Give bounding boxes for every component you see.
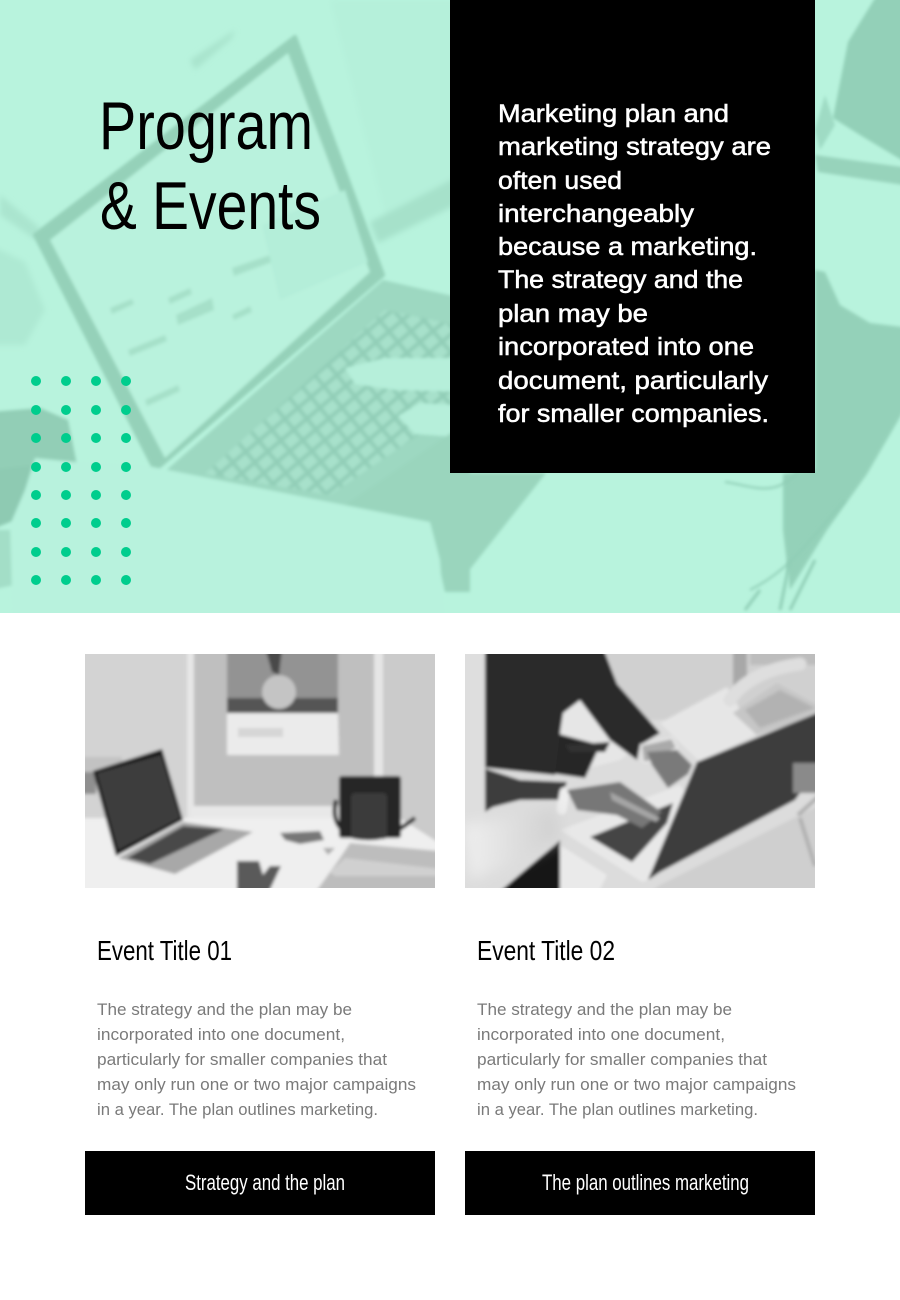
event title 01: Event Title 01 [97, 935, 232, 966]
event description 02 [477, 1001, 796, 1119]
desk [660, 687, 755, 762]
laptop base and keyboard [565, 786, 684, 880]
letter V [235, 859, 282, 888]
poster [226, 654, 339, 700]
event title 02: Event Title 02 [477, 935, 615, 966]
laptop [93, 749, 183, 856]
foreground blur [475, 654, 488, 818]
magazines [317, 842, 435, 888]
panel text: interchangeably [498, 200, 695, 228]
title [99, 88, 321, 244]
hands on keyboard [345, 357, 450, 392]
laptop lid [648, 708, 830, 880]
event description 02: in a year. The plan outlines marketing. [477, 1101, 758, 1119]
background right [793, 763, 823, 793]
panel text: Marketing plan and [498, 100, 729, 128]
text panel [450, 0, 815, 473]
event description 02: may only run one or two major campaigns [477, 1076, 796, 1094]
panel text: marketing strategy are [498, 133, 771, 161]
panel text: document, particularly [498, 367, 769, 395]
laptop screen [35, 37, 383, 470]
hero background photo [0, 0, 900, 625]
mug at left [0, 408, 78, 470]
chair [550, 733, 600, 778]
notebook paper [10, 458, 445, 625]
panel text: often used [498, 167, 622, 195]
event description 02: incorporated into one document, [477, 1026, 725, 1044]
button 01: Strategy and the plan [185, 1170, 345, 1195]
panel text: incorporated into one [498, 333, 754, 361]
event description 02: particularly for smaller companies that [477, 1051, 767, 1069]
camera [335, 800, 415, 838]
event card 01 [85, 935, 435, 1215]
panel text: for smaller companies. [498, 400, 769, 428]
event description 01: may only run one or two major campaigns [97, 1076, 416, 1094]
panel text: The strategy and the [498, 266, 743, 294]
event description 01: particularly for smaller companies that [97, 1051, 387, 1069]
event description 01: in a year. The plan outlines marketing. [97, 1101, 378, 1119]
woman's hair, glasses and neck [833, 0, 900, 165]
photo: desk with laptop and camera [85, 654, 435, 888]
button 01 [85, 1151, 435, 1215]
button 02 [465, 1151, 815, 1215]
laptop keyboard deck [168, 280, 450, 506]
event description 01: incorporated into one document, [97, 1026, 345, 1044]
title: & Events [100, 168, 321, 244]
photo prints [280, 831, 324, 844]
watch and hands [641, 738, 677, 762]
panel text: plan may be [498, 300, 648, 328]
photo: person typing on laptop [465, 654, 815, 888]
event description 02: The strategy and the plan may be [477, 1001, 732, 1019]
event description 01 [97, 1001, 416, 1119]
title: Program [99, 88, 313, 164]
sweater [480, 640, 660, 775]
tablet [559, 847, 606, 888]
panel text [498, 100, 771, 428]
dark base below the laptop [347, 433, 471, 593]
dot grid [31, 376, 131, 585]
phone on desk [730, 664, 800, 700]
button 02: The plan outlines marketing [542, 1170, 749, 1195]
event description 01: The strategy and the plan may be [97, 1001, 352, 1019]
event card 02 [465, 935, 815, 1215]
panel text: because a marketing. [498, 233, 757, 261]
